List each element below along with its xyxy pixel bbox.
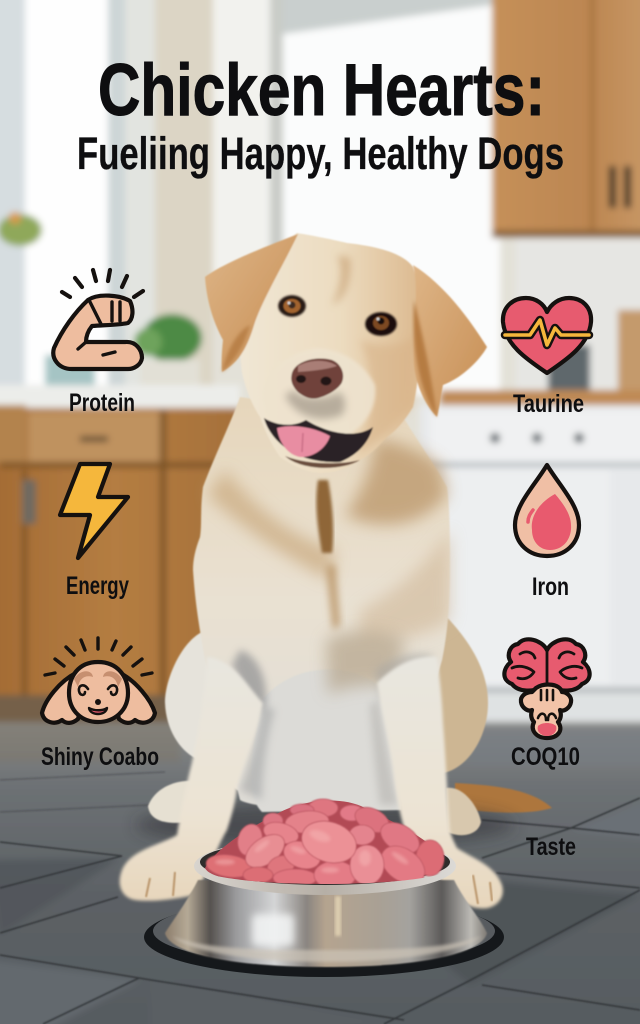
label: coq10: COQ10: [511, 743, 580, 771]
label: taurine: Taurine: [513, 390, 584, 418]
label: energy: Energy: [66, 572, 129, 600]
icon: heart with pulse: [503, 298, 591, 373]
title: [77, 50, 564, 179]
benefit: shiny coat: [41, 638, 159, 771]
floor tile lines: [0, 772, 640, 1024]
grey muzzle shade: [285, 390, 345, 419]
dog body: [165, 397, 488, 812]
front leg left: [120, 657, 263, 901]
lower jaw fur: [285, 456, 360, 468]
hind paws: [148, 781, 192, 823]
tan chest collar: [207, 470, 335, 580]
muzzle: [262, 348, 375, 441]
benefit: energy: [60, 464, 129, 600]
benefit: taurine: [503, 298, 591, 418]
bowl body: [165, 880, 487, 967]
chest center streak: [316, 480, 333, 553]
tan patch right: [345, 440, 447, 525]
icon: brain: [504, 639, 590, 738]
cheek shading: [355, 330, 418, 455]
meat highlights: [215, 828, 410, 873]
forehead blaze: [332, 255, 350, 305]
tile floor: [0, 722, 640, 1024]
chicken hearts: [205, 799, 444, 892]
icon: dog face: [42, 638, 155, 723]
icon: flexed arm: [53, 270, 143, 369]
head: [205, 233, 487, 473]
title line 1: Chicken Hearts:: [98, 50, 545, 131]
right haunch: [420, 610, 488, 780]
left ear: [205, 234, 298, 372]
counters: [0, 385, 240, 415]
icon: lightning bolt: [60, 464, 128, 558]
left haunch: [165, 633, 260, 800]
label: protein: Protein: [69, 389, 135, 417]
tongue: [277, 426, 330, 457]
benefit: coq10: [504, 639, 590, 771]
bowl mat: [144, 897, 504, 977]
mouth: [264, 418, 373, 462]
plant: [142, 314, 202, 362]
tan side right: [360, 530, 450, 640]
torso: [193, 397, 450, 809]
bowl base sheen: [172, 936, 482, 962]
floor shadow: [135, 803, 515, 847]
label: shiny coabo: Shiny Coabo: [41, 743, 159, 771]
belly: [251, 669, 402, 812]
fur shading: [207, 440, 450, 805]
tail: [455, 783, 552, 813]
left paw toes: [146, 872, 175, 897]
bowl rim: [194, 837, 456, 895]
right paw toes: [473, 875, 492, 904]
benefit: protein: [53, 270, 143, 417]
right eye: [365, 312, 397, 336]
food bowl with chicken hearts: [144, 799, 504, 977]
label: taste: Taste: [526, 833, 576, 861]
left eye: [278, 295, 306, 317]
label: iron: Iron: [532, 573, 569, 601]
lower chest shadow: [326, 631, 405, 695]
benefit: iron: [515, 465, 579, 601]
front leg right: [377, 657, 503, 908]
right ear: [413, 265, 487, 417]
icon: blood drop: [515, 465, 579, 556]
nose: [291, 359, 343, 399]
elbow shadows: [232, 650, 266, 720]
dog: [120, 233, 552, 908]
